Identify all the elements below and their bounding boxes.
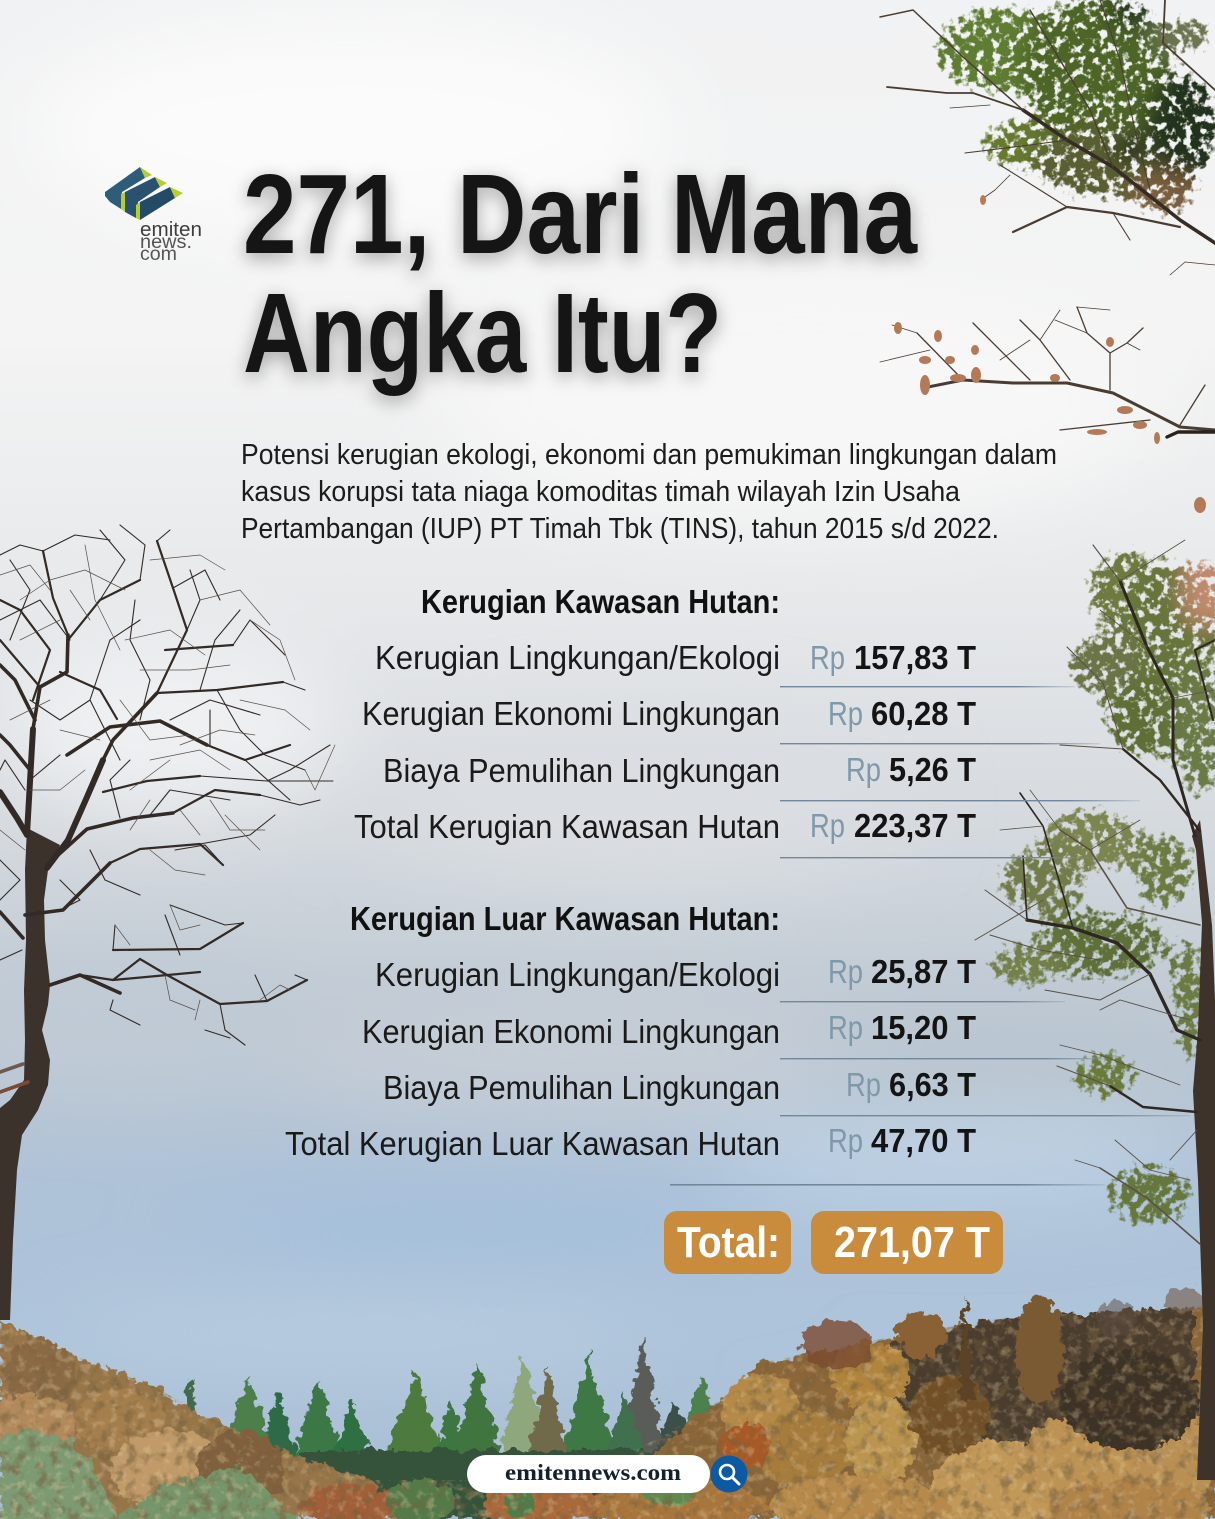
title (243, 151, 918, 396)
row: ekonomi lingkungan: Rp (828, 695, 863, 732)
badge: total label: Total: (677, 1218, 780, 1267)
icon: search (710, 1456, 748, 1492)
row: ekonomi lingkungan luar: Kerugian Ekonomi Lingkungan (362, 1013, 780, 1050)
heading: luar kawasan hutan: Kerugian Luar Kawasan Hutan: (350, 900, 780, 937)
badge: total value: 271,07 T (834, 1218, 990, 1267)
row: ekonomi lingkungan luar: Rp (828, 1009, 863, 1046)
row: ekonomi lingkungan: 60,28 T (871, 695, 976, 732)
leaves (930, 0, 1215, 219)
intro paragraph: Pertambangan (IUP) PT Timah Tbk (TINS), tahun 2015 s/d 2022. (241, 513, 999, 545)
row: lingkungan/ekologi: 157,83 T (854, 639, 976, 676)
row: lingkungan/ekologi luar: 25,87 T (871, 953, 976, 990)
row: lingkungan/ekologi luar: Kerugian Lingkungan/Ekologi (375, 956, 780, 993)
tree: leafy tree on the right (975, 540, 1215, 1480)
row: total kawasan hutan: Total Kerugian Kawasan Hutan (354, 808, 780, 845)
row: ekonomi lingkungan: Kerugian Ekonomi Lingkungan (362, 695, 780, 732)
row: lingkungan/ekologi luar: Rp (828, 953, 863, 990)
branch leaves (894, 322, 1206, 513)
conifer tree line (176, 1335, 726, 1519)
logo: emitennews.com: news. (140, 232, 192, 253)
trunk (0, 828, 60, 1320)
intro paragraph: Potensi kerugian ekologi, ekonomi dan pemukiman lingkungan dalam (241, 439, 1057, 471)
row: lingkungan/ekologi: Rp (810, 639, 845, 676)
leaves (983, 545, 1215, 1231)
logo mark (105, 167, 183, 220)
trunk right (1192, 820, 1215, 1480)
tree: foliage branch top right (880, 0, 1215, 513)
row: biaya pemulihan luar: 6,63 T (889, 1066, 976, 1103)
row: biaya pemulihan luar: Biaya Pemulihan Lingkungan (383, 1069, 780, 1106)
row: lingkungan/ekologi: Kerugian Lingkungan/Ekologi (375, 639, 780, 676)
row: biaya pemulihan luar (383, 1066, 976, 1106)
row: biaya pemulihan: 5,26 T (889, 751, 976, 788)
pink leaf (980, 195, 986, 205)
row: total luar kawasan hutan: 47,70 T (871, 1122, 976, 1159)
land: hills and burnt shrubs (0, 1288, 1215, 1519)
row: total kawasan hutan: Rp (810, 807, 845, 844)
title: 271, Dari Mana (243, 151, 918, 277)
row: biaya pemulihan: Biaya Pemulihan Lingkungan (383, 752, 780, 789)
title: Angka Itu? (243, 270, 722, 396)
table: kerugian luar kawasan hutan (285, 900, 1190, 1186)
hill: dark base and shrubs (0, 1300, 1215, 1519)
row: ekonomi lingkungan luar (362, 1009, 976, 1050)
intro paragraph: kasus korupsi tata niaga komoditas timah wilayah Izin Usaha (241, 476, 961, 508)
row: lingkungan/ekologi luar (375, 953, 976, 993)
logo: emitennews.com: com (140, 244, 177, 265)
row: total kawasan hutan: 223,37 T (854, 807, 976, 844)
branch: second right branch (880, 307, 1215, 437)
table: kerugian kawasan hutan (354, 583, 1140, 858)
heading: kawasan hutan: Kerugian Kawasan Hutan: (421, 583, 780, 620)
burnt trees on right hill (801, 1288, 1205, 1405)
badge: total value (811, 1211, 1003, 1274)
footer: website search bar: emitennews.com (505, 1460, 681, 1485)
row: ekonomi lingkungan luar: 15,20 T (871, 1009, 976, 1046)
footer: website search bar (467, 1455, 748, 1493)
row: biaya pemulihan: Rp (846, 751, 881, 788)
row: total luar kawasan hutan: Rp (828, 1122, 863, 1159)
row: biaya pemulihan luar: Rp (846, 1066, 881, 1103)
logo: emitennews.com: emiten (140, 219, 202, 241)
logo: emitennews.com (105, 167, 202, 265)
intro paragraph (241, 439, 1057, 545)
tree: bare tree on the left (0, 525, 335, 1320)
row: total luar kawasan hutan: Total Kerugian Luar Kawasan Hutan (285, 1125, 780, 1162)
badge: total label (664, 1211, 791, 1274)
